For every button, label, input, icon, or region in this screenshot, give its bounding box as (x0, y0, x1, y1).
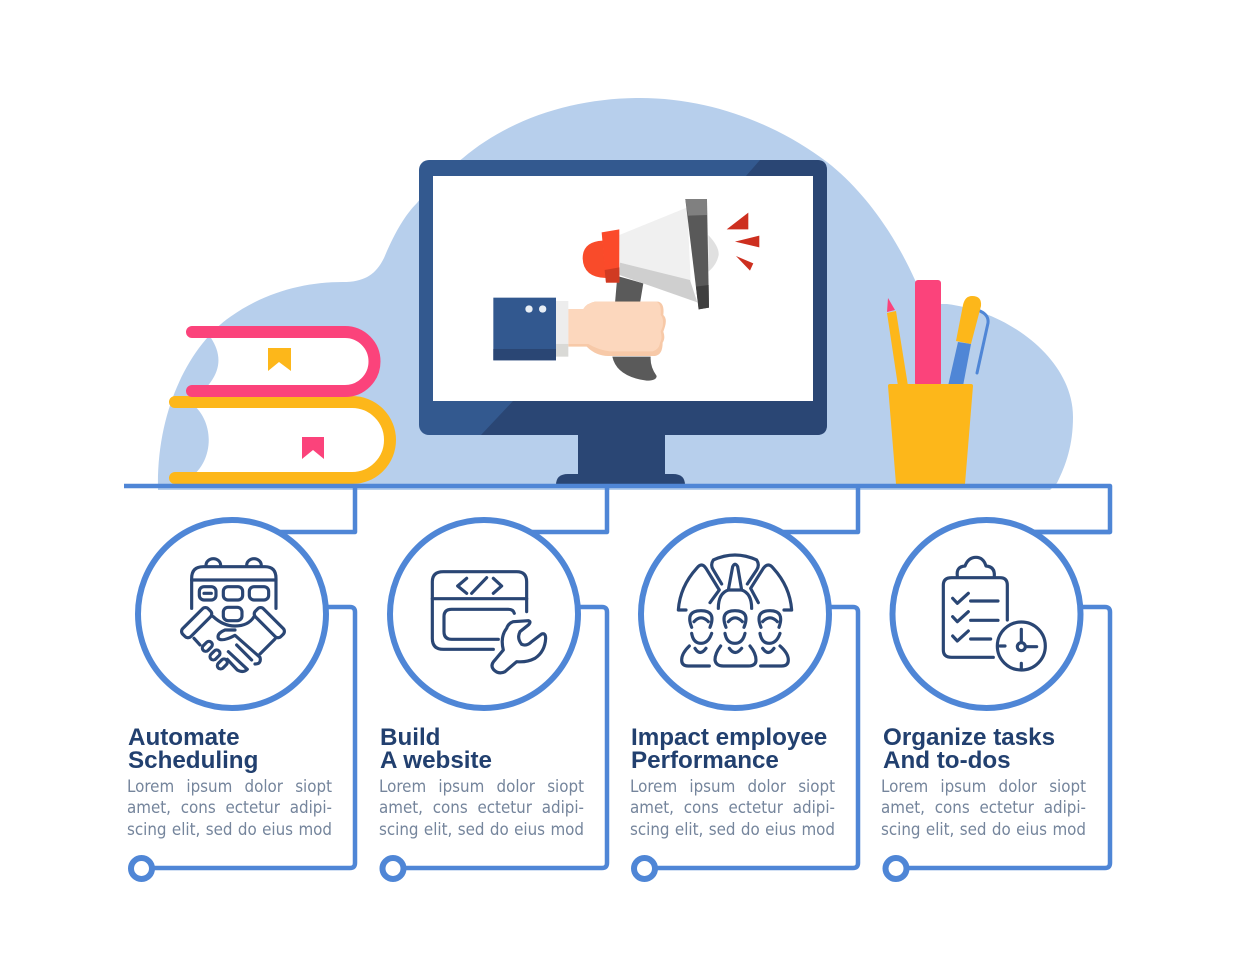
monitor (419, 160, 827, 485)
icon: calendar and handshake (180, 559, 286, 671)
shelf line (124, 486, 1110, 532)
card 4 text: amet, cons ectetur adipi- (881, 797, 1086, 817)
megaphone in hand (493, 199, 759, 381)
sound waves (727, 213, 759, 271)
card 4 text: Lorem ipsum dolor siopt (881, 776, 1086, 796)
card 1 heading (128, 724, 258, 774)
card 4 heading: Organize tasks (883, 724, 1055, 751)
icon: checklist and clock (943, 557, 1045, 670)
megaphone handle (612, 276, 657, 381)
card 3 heading: Impact employee (631, 724, 827, 751)
sleeve (493, 298, 556, 360)
card 3 text: amet, cons ectetur adipi- (630, 797, 835, 817)
card 2 text: Lorem ipsum dolor siopt (379, 776, 584, 796)
card 4 heading: And to-dos (883, 747, 1011, 774)
connector: card 4 (904, 532, 1110, 868)
card 1 text: scing elit, sed do eius mod (127, 819, 332, 839)
card 4 text: scing elit, sed do eius mod (881, 819, 1086, 839)
card 2 heading: A website (380, 747, 492, 774)
card 1 heading: Automate (128, 724, 240, 751)
hand (568, 302, 666, 356)
card 2 heading (380, 724, 492, 774)
pencil (887, 298, 908, 386)
icon circles (138, 520, 1080, 708)
card 1 text: Lorem ipsum dolor siopt (127, 776, 332, 796)
card 3 text: Lorem ipsum dolor siopt (630, 776, 835, 796)
card 3 heading: Performance (631, 747, 779, 774)
connector: card 1 (150, 486, 355, 868)
card 2 text (379, 776, 584, 839)
card 4 text (881, 776, 1086, 839)
ruler (915, 280, 941, 386)
card 2 text: scing elit, sed do eius mod (379, 819, 584, 839)
card 1 text (127, 776, 332, 839)
card 2 text: amet, cons ectetur adipi- (379, 797, 584, 817)
icon: website code and wrench (432, 572, 546, 673)
connector: card 2 (402, 486, 607, 868)
megaphone red back (583, 229, 619, 283)
megaphone cone (619, 199, 719, 309)
pink book (192, 332, 374, 391)
card 1 heading: Scheduling (128, 747, 258, 774)
end dots (131, 858, 906, 879)
card 3 text (630, 776, 835, 839)
pencil cup (887, 280, 988, 484)
shirt cuff (556, 301, 568, 357)
background blob (158, 98, 1073, 490)
cup (888, 384, 973, 484)
card 1 text: amet, cons ectetur adipi- (127, 797, 332, 817)
yellow book (175, 402, 390, 478)
connector: card 3 (653, 486, 858, 868)
icon: employee team (678, 555, 792, 666)
card 4 heading (883, 724, 1055, 774)
pen (948, 296, 988, 386)
card 3 heading (631, 724, 827, 774)
books (175, 332, 390, 478)
card 2 heading: Build (380, 724, 440, 751)
card 3 text: scing elit, sed do eius mod (630, 819, 835, 839)
